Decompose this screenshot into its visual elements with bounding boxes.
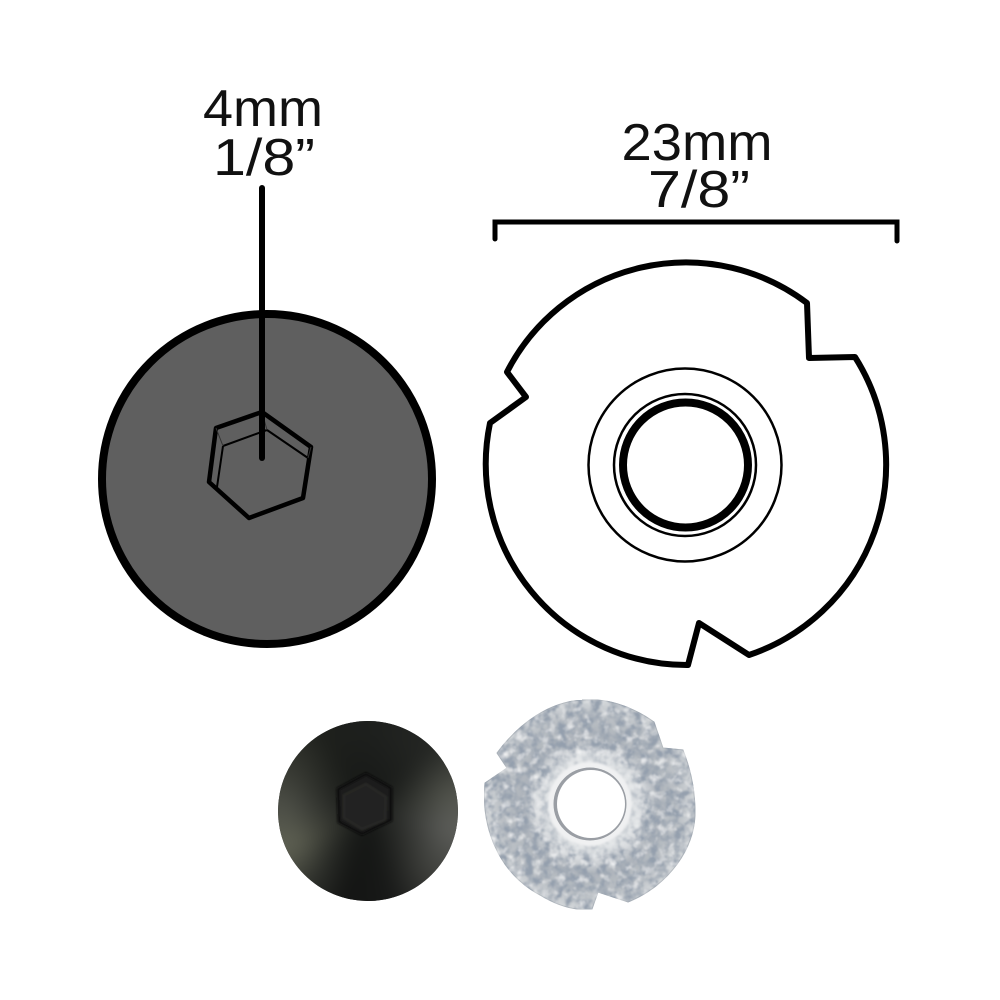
label: 4mm 1/8 inch: 1/8” (213, 129, 315, 187)
label: 4mm 1/8 inch (203, 80, 323, 187)
nut body (484, 700, 695, 909)
label: 23mm 7/8 inch: 7/8” (648, 161, 750, 219)
label: 23mm 7/8 inch: 23mm (622, 114, 772, 172)
photo: zinc T-nut (484, 700, 695, 909)
hole rim (554, 768, 626, 840)
dimension pointer line (259, 188, 265, 458)
hole (557, 770, 625, 838)
outer collar ring (614, 394, 756, 536)
bore ring (623, 402, 748, 528)
raised collar (538, 752, 642, 856)
cap disc (102, 314, 432, 644)
photo: hex socket on black cap (338, 774, 391, 834)
label: 23mm 7/8 inch (622, 114, 772, 219)
diagram: cap with hex socket (102, 188, 432, 644)
dimension bracket: 23mm width (495, 222, 897, 241)
hex socket (209, 412, 311, 518)
label: 4mm 1/8 inch: 4mm (203, 80, 323, 138)
diagram: T-nut outline (486, 262, 886, 665)
flange ring (588, 368, 782, 562)
T-nut body with three notches (486, 262, 886, 665)
collar highlight (548, 762, 632, 846)
cap photo: black disc base (278, 721, 458, 901)
